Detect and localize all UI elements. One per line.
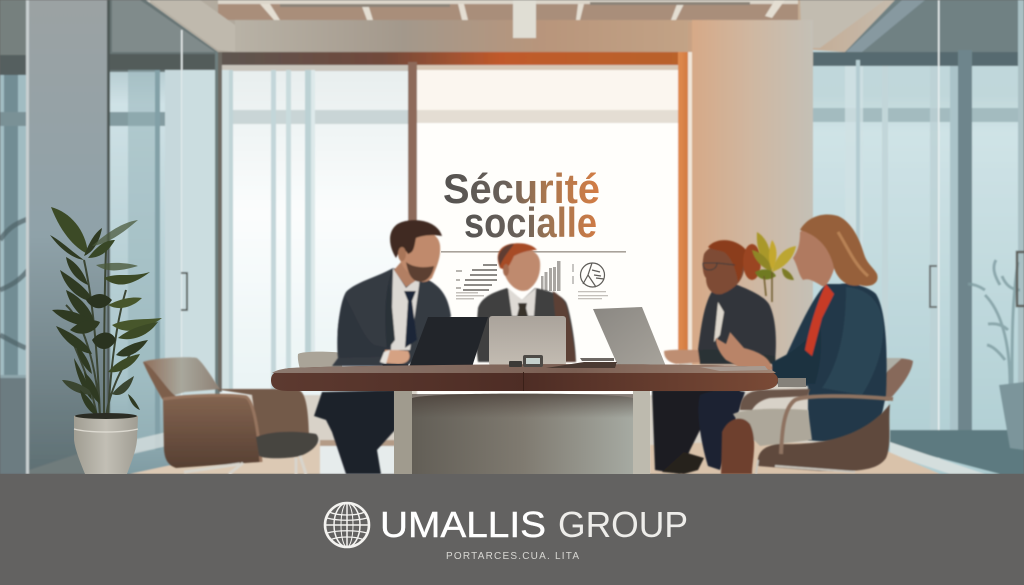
woman skirt — [733, 409, 812, 446]
logo wordmark light: GROUP — [558, 504, 688, 545]
man 1 neck — [394, 255, 423, 287]
plant leaves — [50, 207, 162, 416]
person 3 jacket — [696, 282, 776, 362]
far-left glass — [0, 0, 28, 474]
reflected pot — [999, 382, 1024, 450]
column — [29, 0, 107, 470]
woman red blouse — [805, 284, 834, 356]
mini chart: pie — [580, 263, 604, 287]
logo wordmark bold: UMALLIS — [380, 504, 546, 545]
man 2 shirt — [508, 288, 536, 316]
mini caption left — [456, 292, 484, 300]
man 1 hair — [390, 220, 442, 258]
woman on right — [716, 215, 887, 442]
bottom brand band — [0, 474, 1024, 585]
papers stack right — [778, 378, 806, 387]
reflected plant right — [968, 260, 1020, 385]
table top — [271, 364, 778, 391]
man 1 legs — [314, 390, 395, 474]
far chair arm — [740, 389, 810, 410]
title rule — [441, 251, 626, 253]
table pedestal — [412, 394, 633, 474]
floor — [130, 443, 395, 474]
man 1 with dark suit — [314, 220, 451, 474]
man 2 jacket — [476, 288, 576, 362]
person 3 legs — [652, 390, 740, 474]
laptop 3 silver — [593, 307, 704, 370]
laptop 2 silver — [489, 316, 566, 366]
man 1 beard — [406, 262, 434, 282]
table — [271, 355, 806, 474]
plant pot — [74, 413, 138, 474]
chair body — [758, 404, 890, 471]
icon: table device — [523, 355, 543, 367]
person 3 head — [703, 245, 744, 294]
man 1 jacket — [332, 268, 451, 366]
woman face — [793, 229, 836, 286]
ceiling — [150, 0, 900, 54]
logo subtitle: PORTARCES.CUA. LITA — [446, 551, 579, 562]
man 2 centre — [476, 243, 576, 362]
table legs — [394, 390, 412, 474]
icon: globe — [325, 503, 369, 547]
laptop 1 black — [382, 317, 488, 370]
left armchair — [143, 357, 318, 474]
icon: potted plant left — [50, 207, 162, 474]
man 1 face — [397, 229, 440, 282]
woman hair — [800, 215, 878, 286]
logo — [325, 503, 688, 562]
icon: yellow plant behind — [752, 232, 796, 302]
woman legs — [721, 418, 754, 474]
mini chart: vertical bars — [541, 261, 560, 291]
woman hand — [716, 332, 772, 380]
man 1 shirt and tie — [391, 268, 420, 350]
person 3 hair and bun — [708, 240, 746, 282]
back wall — [692, 20, 813, 365]
man 2 hair — [498, 243, 537, 270]
mini arrows — [572, 264, 574, 284]
title line 1: Sécurité — [443, 165, 600, 212]
man 2 face — [502, 248, 540, 291]
papers on table — [546, 362, 617, 368]
person 3 arm and hand — [664, 350, 704, 364]
right armchair back — [866, 358, 913, 402]
icon: door handle left — [181, 273, 187, 310]
title text — [443, 165, 600, 246]
right glass — [813, 0, 1024, 474]
person 3 with glasses — [652, 240, 776, 474]
plant stems — [66, 250, 135, 416]
right armchair — [721, 389, 893, 474]
person 3 glasses — [703, 263, 735, 270]
window left — [220, 65, 410, 395]
man 1 arm and hand — [337, 296, 390, 358]
title line 2: socialle — [464, 199, 597, 246]
woman jacket — [772, 283, 887, 442]
left glass panel — [107, 0, 218, 474]
far chair back — [298, 352, 342, 382]
window right — [417, 65, 679, 395]
mini caption right — [578, 291, 608, 299]
mini chart: horizontal bars — [456, 264, 497, 291]
handles right — [930, 266, 937, 307]
window frame — [218, 52, 688, 65]
